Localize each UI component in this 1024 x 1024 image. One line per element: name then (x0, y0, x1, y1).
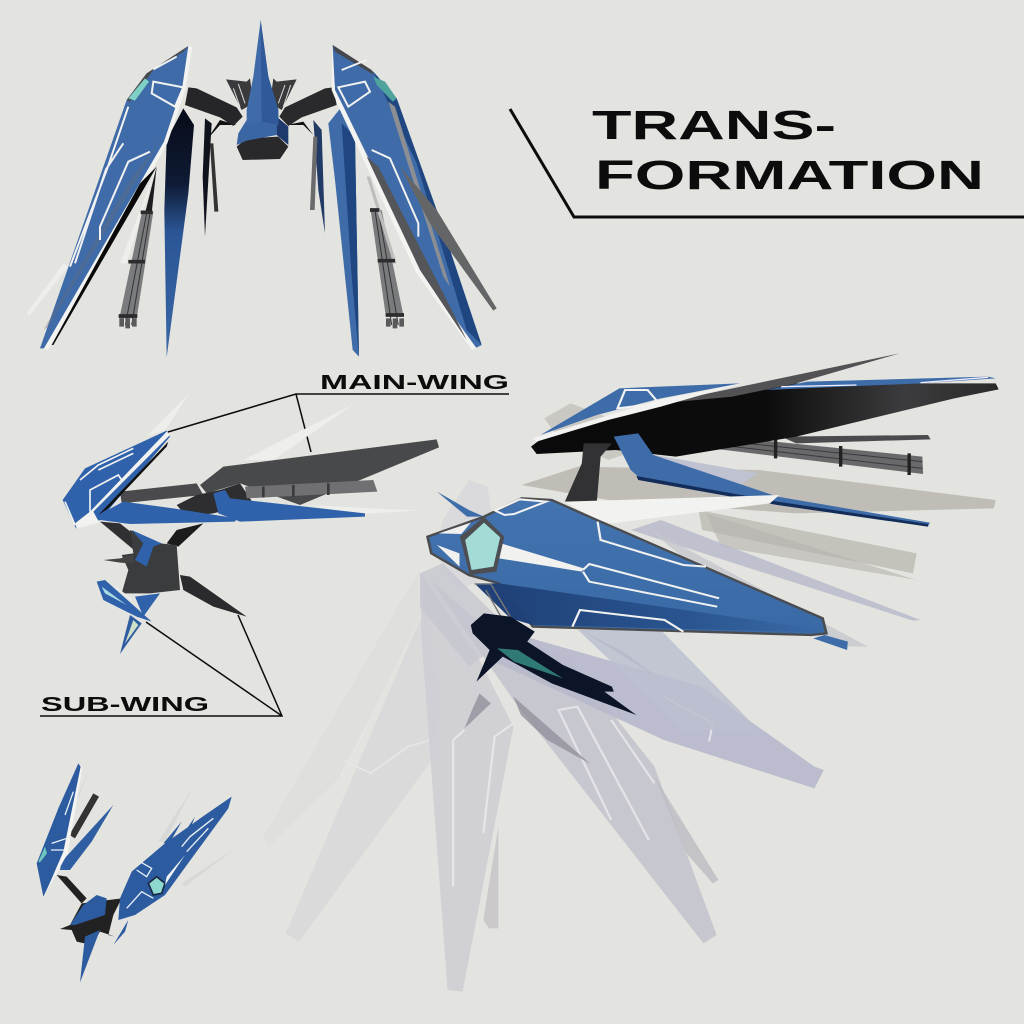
gatling front (245, 480, 377, 498)
grey spike (661, 353, 900, 403)
right main wing (333, 45, 482, 348)
folded arm and body (57, 875, 87, 903)
lower darker facet (499, 583, 821, 632)
gatling (676, 432, 923, 474)
folded hexagon (148, 877, 165, 895)
sub-wing label: SUB-WING (41, 694, 209, 716)
title: FORMATION (595, 152, 984, 198)
back fins (226, 78, 297, 110)
sub-wing leader lines (40, 615, 282, 716)
left gatling (119, 167, 157, 328)
center spike (247, 20, 278, 125)
folded right wing (163, 817, 195, 843)
main-wing label: MAIN-WING (320, 372, 509, 394)
icon: teal hexagon panel (460, 517, 504, 575)
panel white details (437, 523, 471, 567)
white fin (565, 495, 779, 523)
main-wing leader lines (168, 394, 509, 452)
title: TRANS- (592, 102, 836, 148)
wing group: side view (63, 393, 439, 654)
blue blades (98, 502, 237, 524)
arms (185, 87, 243, 126)
sub wing side (135, 593, 160, 617)
gatling rear (120, 483, 203, 503)
left main wing side (63, 431, 170, 528)
right gatling (367, 177, 404, 328)
leg (565, 443, 612, 502)
title (592, 102, 984, 198)
white strip (533, 384, 740, 442)
ghost trail behind main wing (420, 403, 996, 730)
right sub wing (328, 107, 359, 357)
top blue (540, 383, 740, 435)
left sub wing (164, 108, 194, 357)
black hull (531, 383, 999, 457)
left main wing (40, 46, 188, 348)
body (122, 530, 180, 593)
body (237, 137, 288, 160)
wing group: top front view (27, 20, 497, 357)
blue blade (614, 433, 930, 527)
center small blades and gatlings (203, 118, 212, 237)
main wing: large foreground panel (428, 492, 848, 715)
title bracket line (510, 109, 1024, 217)
panel body (428, 498, 826, 635)
grey blade (781, 435, 931, 443)
dark main wing (200, 439, 439, 505)
wing group: bottom-left folded view (37, 763, 235, 982)
ghost motion trail of wings (263, 570, 824, 992)
arms (100, 522, 145, 555)
main wing: upper side view (531, 353, 999, 527)
sub wing below panel (471, 613, 636, 715)
tail (813, 635, 848, 650)
spike (437, 492, 484, 517)
